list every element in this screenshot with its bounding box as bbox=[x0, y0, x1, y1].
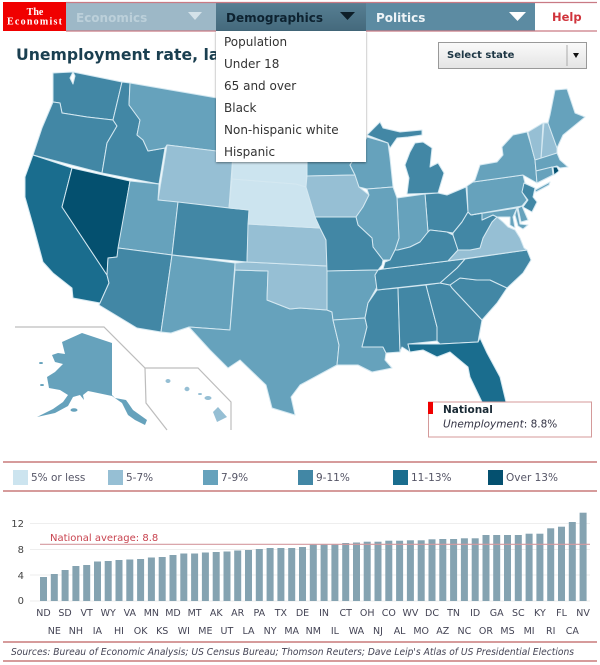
title: Unemployment rate, latest bbox=[16, 45, 255, 64]
map of US states bbox=[25, 72, 585, 415]
dropdown menu: Black bbox=[224, 101, 257, 115]
state labels: ID bbox=[470, 608, 480, 619]
state: TN bbox=[375, 259, 465, 290]
state labels: CO bbox=[382, 608, 396, 619]
state labels: NC bbox=[458, 626, 472, 637]
dropdown menu: Non-hispanic white bbox=[224, 123, 339, 137]
state labels: PA bbox=[253, 608, 266, 619]
state labels: WV bbox=[402, 608, 419, 619]
state: NE bbox=[229, 179, 320, 228]
state labels: VA bbox=[124, 608, 136, 619]
state: MA bbox=[535, 153, 568, 171]
state: NJ bbox=[522, 183, 537, 212]
axis: 4 bbox=[18, 571, 24, 582]
state: NC bbox=[440, 250, 531, 288]
legend bbox=[3, 462, 597, 491]
state labels: NV bbox=[576, 608, 590, 619]
dropdown menu bbox=[216, 31, 366, 162]
state: ID bbox=[102, 82, 165, 184]
axis: 0 bbox=[18, 596, 24, 607]
tab: Economics: Economics bbox=[76, 11, 147, 25]
tab: Politics bbox=[366, 3, 535, 31]
dropdown menu: Under 18 bbox=[224, 57, 279, 71]
state labels: ME bbox=[198, 626, 213, 637]
sources footer bbox=[3, 642, 597, 661]
state labels: OK bbox=[134, 626, 148, 637]
state: Long Island bbox=[535, 182, 550, 192]
state labels: MO bbox=[413, 626, 429, 637]
logo: Economist bbox=[7, 16, 63, 28]
state labels: NJ bbox=[373, 626, 383, 637]
state labels: CT bbox=[339, 608, 352, 619]
tab: Demographics: Demographics bbox=[226, 11, 323, 25]
dropdown menu: 65 and over bbox=[224, 79, 296, 93]
state: AZ bbox=[99, 248, 172, 332]
state labels: RI bbox=[546, 626, 555, 637]
state labels: SC bbox=[512, 608, 525, 619]
state: MI upper bbox=[367, 122, 422, 148]
dropdown menu: Hispanic bbox=[224, 145, 275, 159]
state: PA bbox=[467, 175, 527, 215]
state: WI bbox=[350, 137, 393, 189]
state: NY bbox=[473, 132, 537, 183]
state labels: IA bbox=[93, 626, 103, 637]
state: CO bbox=[172, 202, 249, 262]
state labels: NM bbox=[306, 626, 321, 637]
state labels: OR bbox=[479, 626, 493, 637]
state: WY bbox=[158, 145, 233, 208]
state labels: OH bbox=[360, 608, 375, 619]
legend: 9-11% bbox=[316, 472, 350, 484]
national callout bbox=[428, 402, 592, 437]
legend: 5% or less bbox=[31, 472, 85, 484]
dropdown menu: Population bbox=[224, 35, 287, 49]
state: MT bbox=[129, 83, 232, 153]
state labels: IN bbox=[319, 608, 329, 619]
state labels bbox=[36, 608, 590, 637]
legend: 7-9% bbox=[221, 472, 248, 484]
axis: 12 bbox=[11, 519, 24, 530]
state: OK bbox=[235, 262, 327, 310]
state labels: CA bbox=[566, 626, 579, 637]
state: MN bbox=[307, 150, 360, 176]
state labels: MI bbox=[524, 626, 535, 637]
state: DE bbox=[518, 206, 528, 222]
state labels: UT bbox=[221, 626, 233, 637]
state selector bbox=[438, 42, 586, 68]
state: NV bbox=[62, 168, 130, 275]
state: TX bbox=[189, 270, 339, 415]
state labels: TX bbox=[274, 608, 288, 619]
state labels: NE bbox=[48, 626, 61, 637]
state labels: ND bbox=[36, 608, 51, 619]
state labels: MA bbox=[284, 626, 300, 637]
state: CA bbox=[25, 155, 109, 303]
state: NH bbox=[541, 123, 557, 159]
state labels: WI bbox=[178, 626, 190, 637]
state labels: TN bbox=[446, 608, 460, 619]
state labels: AK bbox=[210, 608, 223, 619]
state: FL bbox=[408, 338, 506, 402]
state: SC bbox=[450, 278, 507, 320]
national callout: National bbox=[443, 404, 493, 416]
state labels: AZ bbox=[436, 626, 450, 637]
state: AR bbox=[327, 270, 378, 320]
state labels: DC bbox=[425, 608, 439, 619]
state: MD eastern shore bbox=[515, 208, 528, 229]
state labels: NH bbox=[69, 626, 83, 637]
state labels: AL bbox=[394, 626, 406, 637]
tab: Help: Help bbox=[552, 10, 582, 24]
state: Hawaii bbox=[166, 379, 227, 422]
tab: Economics bbox=[66, 3, 216, 31]
national callout: Unemployment: 8.8% bbox=[443, 418, 557, 430]
tab: Politics: Politics bbox=[376, 11, 425, 25]
axis: 8 bbox=[18, 545, 24, 556]
state labels: IL bbox=[331, 626, 340, 637]
state labels: GA bbox=[490, 608, 504, 619]
state: RI bbox=[553, 167, 559, 175]
state labels: KY bbox=[534, 608, 546, 619]
state labels: MS bbox=[500, 626, 515, 637]
axis bbox=[11, 519, 590, 607]
state labels: FL bbox=[556, 608, 568, 619]
bar chart bbox=[11, 513, 590, 637]
state: MS bbox=[362, 288, 400, 353]
state labels: DE bbox=[296, 608, 309, 619]
state: MD bbox=[471, 208, 517, 228]
state: IL bbox=[356, 187, 399, 260]
state: KS bbox=[247, 224, 327, 266]
state labels: LA bbox=[242, 626, 255, 637]
state labels: WY bbox=[101, 608, 116, 619]
state labels: VT bbox=[81, 608, 93, 619]
header bar bbox=[3, 2, 597, 31]
state labels: MD bbox=[165, 608, 181, 619]
state: LA bbox=[333, 318, 392, 372]
sources footer: Sources: Bureau of Economic Analysis; US Census Bureau; Thomson Reuters; Dave Leip's Atlas of US Presidential Elections bbox=[11, 647, 574, 658]
state: VA bbox=[448, 217, 527, 261]
state: AL bbox=[398, 285, 437, 352]
state labels: HI bbox=[114, 626, 124, 637]
state labels: WA bbox=[349, 626, 365, 637]
national average line: National average: 8.8 bbox=[50, 533, 158, 544]
state: OH bbox=[425, 187, 468, 233]
state labels: MT bbox=[188, 608, 202, 619]
state labels: MN bbox=[144, 608, 159, 619]
state labels: SD bbox=[58, 608, 72, 619]
state: WV bbox=[453, 212, 497, 250]
tab: Demographics bbox=[216, 3, 366, 31]
state: MO bbox=[315, 217, 383, 271]
state labels: NY bbox=[264, 626, 277, 637]
state: OR bbox=[33, 102, 117, 173]
logo: The bbox=[27, 7, 44, 18]
state selector: Select state bbox=[447, 50, 515, 61]
bars bbox=[40, 513, 587, 601]
inset frames bbox=[15, 327, 231, 430]
state: NM bbox=[161, 255, 235, 333]
state labels: KS bbox=[156, 626, 168, 637]
state labels: AR bbox=[231, 608, 245, 619]
state: VT bbox=[528, 123, 543, 160]
state: MI lower bbox=[405, 142, 444, 194]
state: GA bbox=[426, 283, 482, 344]
state: CT bbox=[536, 167, 553, 183]
state: WA bbox=[53, 72, 122, 120]
legend: 11-13% bbox=[411, 472, 452, 484]
state: UT bbox=[118, 181, 178, 255]
state: Alaska bbox=[37, 333, 147, 425]
state: IA bbox=[306, 175, 369, 217]
state: SD bbox=[232, 150, 307, 187]
state: ME bbox=[548, 89, 585, 148]
logo bbox=[3, 2, 66, 31]
legend: Over 13% bbox=[506, 472, 558, 484]
legend: 5-7% bbox=[126, 472, 153, 484]
state: IN bbox=[395, 194, 428, 250]
state: KY bbox=[383, 230, 458, 269]
